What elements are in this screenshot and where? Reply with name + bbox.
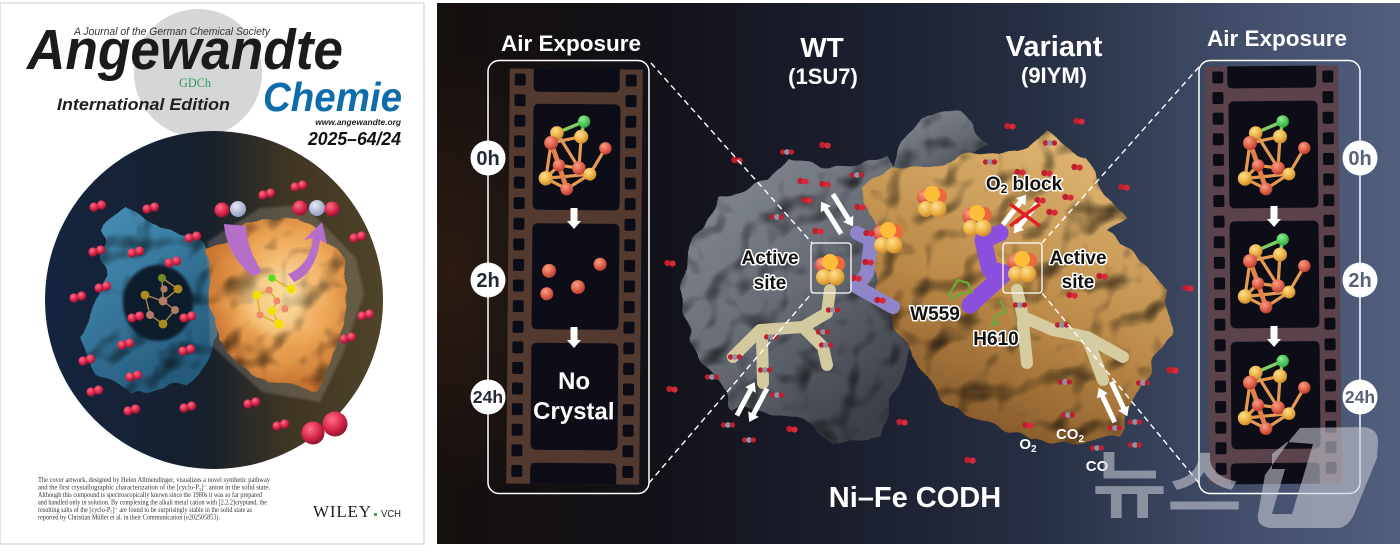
panel: CODH figure background bbox=[437, 3, 1400, 544]
watermark: News1 logo bbox=[1092, 426, 1378, 533]
label: H610: H610 bbox=[973, 329, 1019, 350]
publisher logo bbox=[313, 502, 401, 521]
right air exposure border bbox=[1199, 60, 1360, 494]
label: right active site: Active bbox=[1049, 248, 1107, 269]
time marker left: 2h: 2h bbox=[476, 270, 500, 292]
halo around orange protein bbox=[207, 205, 364, 402]
issue number: 2025–64/24 bbox=[307, 129, 401, 149]
white double arrows bbox=[732, 191, 1133, 425]
heading: air exposure left: Air Exposure bbox=[501, 31, 641, 56]
frame: 24h crystal bbox=[1231, 341, 1321, 449]
label: left active site: site bbox=[754, 273, 786, 294]
website: www.angewandte.org bbox=[315, 117, 401, 127]
time marker right: 24h: 24h bbox=[1345, 387, 1375, 407]
crystal: right 2h bbox=[1238, 233, 1310, 313]
heading: Variant: Variant bbox=[1006, 31, 1103, 63]
label: O2 block: 2 bbox=[1001, 182, 1008, 196]
O2 block red cross bbox=[1010, 204, 1040, 226]
label: O2: O bbox=[1019, 436, 1031, 453]
cover artwork circle bbox=[45, 131, 383, 469]
purple arrows bbox=[224, 222, 327, 282]
cover caption: Although this compound is spectroscopically known since the 1980s it was so far prepared bbox=[38, 491, 262, 499]
frame: top sliver bbox=[534, 69, 620, 92]
tunnel: right cream gas channel bbox=[1017, 290, 1123, 380]
frame: 0h crystal bbox=[1228, 101, 1318, 208]
time marker right: 2h: 2h bbox=[1348, 270, 1372, 292]
cover caption: resulting salts of the [cyclo-P₅]⁻ are found to be surprisingly stable in the solid state as bbox=[38, 506, 252, 514]
label: left active site: Active bbox=[741, 248, 799, 269]
time marker left: 24h: 24h bbox=[473, 387, 503, 407]
heading: air exposure right: Air Exposure bbox=[1207, 26, 1347, 51]
tunnel: left purple channel bbox=[857, 233, 893, 307]
heading: Ni-Fe CODH: Ni–Fe CODH bbox=[829, 482, 1001, 514]
tunnel: left cream gas channel bbox=[733, 290, 830, 383]
protein cavity bbox=[123, 265, 193, 341]
label: O2 block: block bbox=[1007, 174, 1063, 195]
large oxygen molecule bbox=[302, 412, 348, 444]
publisher logo: WILEY bbox=[313, 502, 371, 521]
watermark: News1 logo: 뉴스 bbox=[1092, 426, 1242, 533]
title: Chemie: Chemie bbox=[263, 74, 402, 120]
frame: 2h atoms bbox=[532, 223, 619, 330]
cover caption: and handled only in solution. By complexing the alkali metal cation with [2.2.2]cryptand, the bbox=[38, 498, 267, 506]
residue: W559 bbox=[948, 280, 972, 300]
panel: left film strip bbox=[506, 68, 643, 485]
time marker right: 0h: 0h bbox=[1348, 148, 1372, 170]
GDCh logo: GDCh bbox=[179, 75, 211, 90]
publisher logo: VCH bbox=[381, 509, 401, 520]
frame: 24h no crystal: No bbox=[558, 368, 590, 395]
heading: 1SU7: (1SU7) bbox=[788, 64, 858, 89]
protein: grey WT subunit bbox=[680, 153, 912, 447]
tunnel: right purple channel bbox=[970, 233, 1005, 305]
journal tagline: A Journal of the German Chemical Society bbox=[73, 26, 271, 38]
residue: H610 bbox=[992, 300, 1006, 325]
label: W559: W559 bbox=[910, 304, 960, 325]
title: International Edition: International Edition bbox=[57, 95, 230, 114]
blue protein bbox=[77, 211, 217, 394]
frame: 2h crystal bbox=[1230, 221, 1319, 328]
time marker left: 0h: 0h bbox=[476, 148, 500, 170]
box: right active site bbox=[1003, 243, 1042, 293]
orange protein bbox=[207, 215, 353, 391]
panel: right film strip bbox=[1205, 65, 1342, 485]
crystal: right 0h bbox=[1238, 115, 1310, 195]
frame: bottom sliver bbox=[1231, 463, 1320, 484]
label: CO2: CO bbox=[1056, 426, 1078, 443]
cover caption: The cover artwork, designed by Helen Allmendinger, visualizes a novel synthetic pathway bbox=[38, 476, 270, 484]
box: left active site bbox=[811, 243, 851, 293]
frame: top sliver bbox=[1227, 66, 1316, 88]
frame: 24h no crystal bbox=[530, 343, 618, 450]
frame: 0h crystal bbox=[533, 104, 620, 210]
central glow bbox=[243, 268, 303, 332]
gas balls top bbox=[214, 200, 340, 218]
protein: grey WT back lobe bbox=[895, 113, 993, 180]
label: O2 block: O bbox=[986, 174, 1001, 195]
cover caption bbox=[38, 476, 270, 522]
cover caption: reported by Christian Müller et al. in their Communication (e202505853). bbox=[38, 514, 220, 522]
sprocket holes left film bbox=[511, 74, 637, 478]
sprocket holes right film bbox=[1212, 70, 1337, 475]
heading: 9IYM: (9IYM) bbox=[1021, 63, 1087, 88]
arrows left film bbox=[567, 208, 581, 348]
time marker right: 0h bbox=[1342, 140, 1378, 176]
red oxygen molecules bbox=[69, 180, 374, 431]
cluster in blue protein bbox=[141, 274, 182, 328]
label: O2: 2 bbox=[1031, 444, 1037, 455]
heading: WT: WT bbox=[800, 32, 844, 63]
Fe-S clusters bbox=[815, 186, 1037, 286]
title: Angewandte: Angewandte bbox=[25, 18, 343, 82]
label: CO2: 2 bbox=[1078, 434, 1084, 445]
protein: gold variant subunit bbox=[860, 133, 1170, 450]
frame: 24h no crystal: Crystal bbox=[533, 398, 615, 425]
time marker left: 24h bbox=[470, 380, 506, 414]
cover caption: and the first crystallographic characterization of the [cyclo-P₅]⁻ anion in the solid state. bbox=[38, 484, 270, 492]
label: right active site: site bbox=[1062, 272, 1094, 293]
time marker left: 0h bbox=[470, 140, 506, 176]
left air exposure border bbox=[488, 60, 649, 494]
masthead grey circle bbox=[134, 9, 262, 137]
label: CO: CO bbox=[1086, 458, 1109, 475]
label: left active site bbox=[741, 248, 799, 294]
time marker right: 2h bbox=[1342, 262, 1378, 298]
time marker right: 24h bbox=[1342, 380, 1378, 414]
crystal: right 24h bbox=[1238, 355, 1310, 435]
dashed zoom lines bbox=[649, 63, 1199, 483]
label: right active site bbox=[1049, 248, 1107, 293]
frame: bottom sliver bbox=[530, 463, 616, 484]
arrows right film bbox=[1267, 206, 1281, 347]
panel: journal cover bbox=[0, 3, 424, 544]
time marker left: 2h bbox=[470, 262, 506, 298]
cluster in orange protein bbox=[253, 274, 295, 329]
gas molecules scattered bbox=[664, 118, 1194, 464]
